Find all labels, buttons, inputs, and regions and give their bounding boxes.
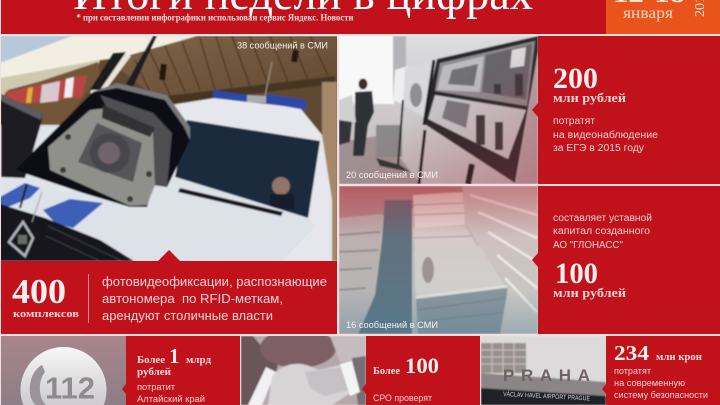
monitor frame — [423, 36, 538, 183]
hood — [0, 177, 316, 261]
description: фотовидеофиксации, распознающие — [102, 275, 327, 289]
stat 200: 200 — [553, 62, 598, 95]
panel: 234 million crowns: на современную — [614, 378, 685, 388]
description: автономера по RFID-меткам, — [102, 292, 283, 306]
caption: 38 messages: 38 сообщений в СМИ — [237, 40, 328, 50]
panel: more than 1 billion: Более — [137, 355, 165, 366]
panel: more than 100 SRO — [362, 336, 480, 405]
panel: more than 1 billion — [122, 336, 240, 405]
lens — [78, 123, 142, 182]
camera body — [48, 108, 155, 206]
white beam — [0, 36, 197, 80]
main photo: camera and police van — [0, 36, 340, 261]
photo: Prague airport — [481, 336, 606, 405]
icon: 112 phone badge — [1, 336, 126, 405]
left black camera — [1, 94, 42, 178]
camera housing — [15, 83, 190, 207]
stat 400 — [12, 272, 79, 320]
blue stripes — [0, 183, 40, 207]
date box: января — [623, 5, 674, 22]
panel: more than 1 billion: потратит — [137, 382, 175, 392]
description: АО "ГЛОНАСС" — [553, 240, 623, 251]
panel: more than 100 SRO: СРО проверят — [373, 393, 432, 403]
stat 100: 100 — [555, 257, 598, 290]
sky — [0, 36, 75, 64]
description: потратят — [553, 116, 595, 127]
date box — [606, 0, 720, 34]
panel: more than 100 SRO: Более — [373, 366, 400, 377]
panel: 200 million: млн рублей — [553, 91, 626, 105]
panel: more than 1 billion: рублей — [137, 367, 171, 378]
stat 400: 400 — [12, 272, 66, 311]
sign letters: PRAHA — [503, 366, 590, 385]
description: на видеонаблюдение — [553, 129, 658, 141]
photo: stacks of money — [339, 186, 538, 334]
left canopy — [8, 62, 100, 130]
stat 1: 1 — [169, 344, 180, 368]
van body — [0, 98, 332, 261]
description: составляет уставной — [553, 213, 652, 224]
monitor screens — [435, 41, 535, 106]
header band — [1, 0, 606, 34]
photo: Prague airport: VÁCLAV HAVEL AIRPORT PRAGUE — [503, 389, 591, 403]
grille — [0, 204, 134, 261]
stat 100: 100 — [405, 353, 439, 378]
flags — [5, 75, 87, 103]
panel: 100 million GLONASS — [532, 186, 720, 334]
description — [553, 116, 658, 154]
windshield — [175, 120, 320, 218]
panel: 100 million GLONASS: млн рублей — [553, 286, 626, 300]
description — [553, 213, 652, 251]
caption: 16 messages: 16 сообщений в СМИ — [346, 320, 438, 330]
description: арендуют столичные власти — [102, 309, 273, 323]
stat 234: 234 — [614, 341, 650, 365]
panel: 400 complexes — [1, 250, 337, 334]
panel: 200 million — [532, 36, 720, 184]
panel: more than 1 billion: Алтайский край — [137, 394, 205, 404]
person — [353, 78, 374, 156]
description — [102, 275, 327, 323]
description: за ЕГЭ в 2015 году — [553, 143, 644, 154]
description: капитал созданного — [553, 226, 650, 237]
footnote: * при составлении инфографики использован сервис Яндекс. Новости — [76, 12, 354, 24]
stat 400: комплексов — [13, 308, 79, 320]
panel: 234 million crowns: потратят — [614, 366, 651, 376]
panel: 234 million crowns — [602, 336, 720, 405]
light bar — [213, 90, 247, 102]
panel: 234 million crowns: млн крон — [656, 352, 702, 363]
wooden ceiling — [110, 36, 337, 98]
caption: 20 messages: 20 сообщений в СМИ — [346, 170, 438, 180]
panel: more than 1 billion: млрд — [186, 355, 212, 366]
poles — [90, 52, 126, 90]
icon: 112 phone badge: 112 — [45, 370, 95, 405]
photo: video monitoring wall — [339, 36, 538, 184]
photo: handshake — [241, 336, 366, 405]
panel: 234 million crowns: систему безопасности — [614, 390, 708, 400]
